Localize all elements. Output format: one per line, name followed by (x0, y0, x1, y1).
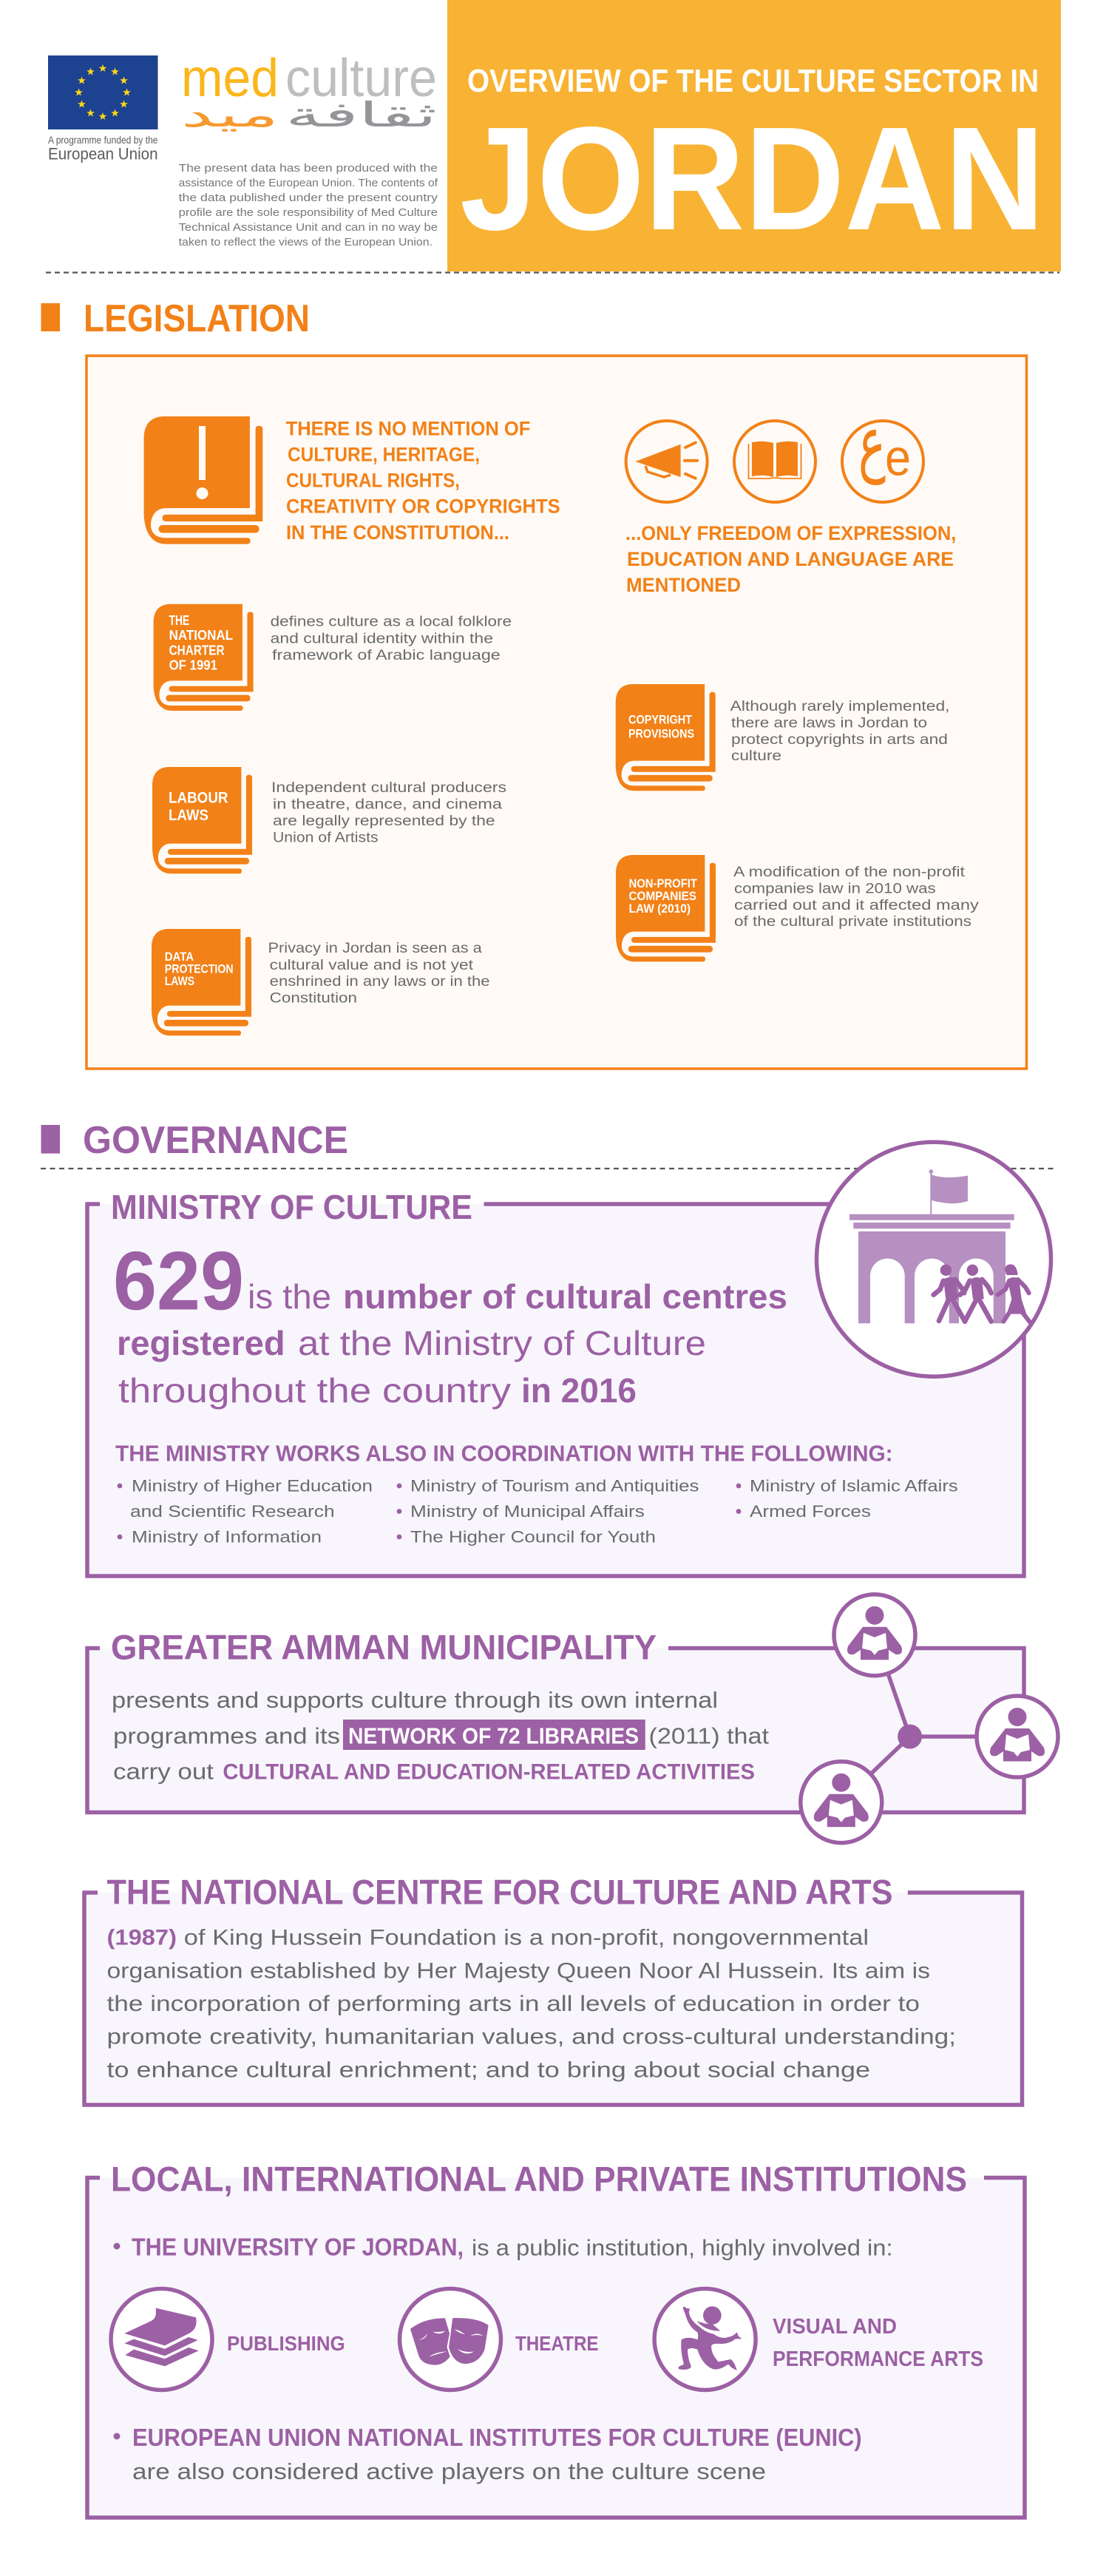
icon: library network (801, 1595, 1058, 1843)
list: partner ministries: The Higher Council for Youth (410, 1528, 656, 1546)
item: data protection laws: DATA (165, 950, 194, 964)
text: national centre description: to enhance cultural enrichment; and to bring about social change (106, 2058, 870, 2083)
heading: governance: GOVERNANCE (83, 1118, 348, 1161)
label: theatre: THEATRE (515, 2332, 599, 2355)
text: EUNIC (114, 2424, 862, 2484)
item: data protection laws: LAWS (165, 975, 194, 988)
panel: greater amman municipality (87, 1595, 1058, 1843)
heading: only freedom of expression (625, 522, 956, 596)
item: national charter: defines culture as a local folklore (271, 615, 512, 630)
icon: cultural centre with visitors (816, 1142, 1051, 1376)
item: national charter: CHARTER (169, 643, 225, 657)
text: national centre description: of King Hussein Foundation is a non-profit, nongovernmental (184, 1926, 869, 1950)
stat: 629 cultural centres: at the Ministry of Culture (298, 1324, 706, 1362)
item: national charter: framework of Arabic language (272, 648, 501, 663)
item: copyright provisions: there are laws in Jordan to (731, 715, 927, 731)
logo: Med Culture: ميد (181, 95, 279, 135)
text: university of jordan: THE UNIVERSITY OF JORDAN, (132, 2234, 464, 2261)
list: partner ministries: Ministry of Islamic Affairs (750, 1477, 958, 1495)
label: visual and performance arts: PERFORMANCE ARTS (773, 2347, 983, 2371)
icon: book with exclamation mark (144, 416, 262, 544)
text: amman description: carry out (113, 1759, 214, 1784)
list: partner ministries: and Scientific Research (130, 1502, 335, 1521)
icon: Arabic and Latin letters: e (885, 429, 911, 487)
stat: 629 cultural centres: number of cultural centres (343, 1277, 787, 1316)
panel: ministry of culture (87, 1142, 1051, 1576)
heading: no mention in constitution: THERE IS NO MENTION OF (286, 417, 530, 439)
heading: institutions: LOCAL, INTERNATIONAL AND PRIVATE INSTITUTIONS (111, 2160, 967, 2199)
disclaimer text: assistance of the European Union. The contents of (179, 177, 438, 189)
label: publishing: PUBLISHING (227, 2332, 345, 2355)
list: partner ministries: Ministry of Tourism and Antiquities (410, 1477, 699, 1495)
funding note: European Union (48, 145, 158, 163)
list: partner ministries (118, 1477, 958, 1546)
text: national centre description (106, 1926, 956, 2083)
item: non-profit companies law: of the cultural private institutions (734, 914, 971, 930)
panel: local, international and private institutions (87, 2160, 1025, 2518)
icon: publishing (111, 2288, 212, 2390)
heading: no mention in constitution: IN THE CONSTITUTION... (286, 521, 509, 544)
heading: no mention in constitution: CULTURAL RIGHTS, (286, 470, 460, 492)
item: data protection laws: PROTECTION (165, 963, 234, 976)
stat: 629 cultural centres: in 2016 (521, 1371, 637, 1410)
item: national charter: OF 1991 (169, 658, 217, 673)
title banner: JORDAN (460, 97, 1045, 261)
list: partner ministries: Ministry of Higher Education (132, 1477, 373, 1495)
disclaimer text: the data published under the present country (179, 192, 438, 204)
list: partner ministries: Ministry of Municipal Affairs (410, 1502, 645, 1521)
item: labour laws: are legally represented by the (273, 814, 495, 829)
disclaimer text: Technical Assistance Unit and can in no way be (179, 221, 438, 234)
icon: theatre masks (399, 2288, 501, 2390)
item: copyright provisions: Although rarely implemented, (730, 699, 949, 714)
text: amman description: presents and supports culture through its own internal (112, 1687, 718, 1713)
text: amman description: programmes and its (113, 1723, 340, 1749)
item: non-profit companies law: A modification of the non-profit (733, 865, 966, 880)
item: labour laws: LAWS (169, 807, 208, 824)
panel: legislation (87, 356, 1026, 1069)
logo: Med Culture (181, 49, 437, 135)
funding note (48, 134, 158, 163)
disclaimer text: taken to reflect the views of the European Union. (179, 236, 433, 249)
item: data protection laws: Constitution (270, 991, 357, 1007)
text: amman description: NETWORK OF 72 LIBRARIES (348, 1724, 639, 1749)
item: labour laws: Independent cultural producers (271, 780, 506, 796)
text: EUNIC: are also considered active players on the culture scene (132, 2458, 766, 2484)
heading: no mention in constitution: CULTURE, HERITAGE, (288, 443, 480, 465)
disclaimer text: The present data has been produced with the (179, 162, 438, 175)
item: labour laws: LABOUR (169, 790, 228, 807)
list: partner ministries: Armed Forces (750, 1502, 871, 1521)
stat: 629 cultural centres: throughout the country (118, 1371, 511, 1410)
text: university of jordan (114, 2234, 893, 2261)
heading: no mention in constitution (286, 417, 560, 544)
item: labour laws: Union of Artists (273, 831, 379, 846)
item: copyright provisions (616, 684, 949, 791)
heading: only freedom of expression: MENTIONED (626, 574, 741, 596)
item: national charter: NATIONAL (169, 628, 233, 643)
item: non-profit companies law: COMPANIES (628, 890, 696, 903)
logo: Med Culture: culture (285, 49, 437, 108)
item: non-profit companies law: NON-PROFIT (628, 877, 697, 890)
text: amman description: CULTURAL AND EDUCATION-RELATED ACTIVITIES (223, 1760, 755, 1784)
heading: legislation: LEGISLATION (84, 297, 310, 339)
label: visual and performance arts (773, 2315, 983, 2371)
icon: EU flag (48, 55, 158, 129)
title banner: OVERVIEW OF THE CULTURE SECTOR IN (467, 63, 1039, 99)
item: labour laws: in theatre, dance, and cinema (273, 797, 503, 813)
text: EUNIC: EUROPEAN UNION NATIONAL INSTITUTES FOR CULTURE (EUNIC) (132, 2424, 862, 2452)
icon: visual and performance arts (654, 2288, 756, 2390)
text: national centre description: the incorporation of performing arts in all levels of education in order to (106, 1992, 920, 2016)
stat: 629 cultural centres (113, 1235, 787, 1410)
item: non-profit companies law: companies law in 2010 was (734, 882, 936, 897)
title banner (447, 0, 1061, 271)
logo: Med Culture: ثقافة (285, 95, 437, 135)
label: visual and performance arts: VISUAL AND (773, 2315, 897, 2339)
disclaimer text: profile are the sole responsibility of Med Culture (179, 206, 438, 219)
text: amman description: (2011) that (649, 1723, 769, 1749)
text: university of jordan: is a public institution, highly involved in: (472, 2234, 893, 2260)
icon: megaphone (626, 421, 708, 502)
logo: Med Culture: med (181, 49, 279, 108)
item: national charter (154, 604, 512, 711)
item: national charter: THE (169, 613, 189, 628)
heading: only freedom of expression: EDUCATION AND LANGUAGE ARE (627, 548, 954, 570)
heading: ministry of culture: MINISTRY OF CULTURE (111, 1188, 472, 1226)
item: non-profit companies law: carried out and it affected many (734, 898, 979, 913)
heading: no mention in constitution: CREATIVITY OR COPYRIGHTS (286, 496, 560, 518)
subheading: coordination: THE MINISTRY WORKS ALSO IN COORDINATION WITH THE FOLLOWING: (115, 1441, 893, 1466)
heading: national centre: THE NATIONAL CENTRE FOR CULTURE AND ARTS (106, 1872, 893, 1911)
stat: 629 cultural centres: is the (248, 1277, 331, 1316)
item: copyright provisions: PROVISIONS (628, 727, 694, 740)
item: data protection laws: Privacy in Jordan is seen as a (268, 941, 482, 956)
funding note: A programme funded by the (48, 134, 158, 146)
disclaimer text (179, 162, 438, 249)
text: national centre description: organisation established by Her Majesty Queen Noor Al Hussein. Its aim is (106, 1958, 930, 1984)
heading: only freedom of expression: ...ONLY FREEDOM OF EXPRESSION, (625, 522, 956, 544)
panel: national centre for culture and arts (84, 1872, 1022, 2105)
item: national charter: and cultural identity within the (271, 631, 493, 646)
heading: greater amman: GREATER AMMAN MUNICIPALITY (111, 1627, 657, 1666)
icon: Arabic and Latin letters: ع (858, 401, 886, 485)
text: national centre description: (1987) (106, 1926, 177, 1950)
item: labour laws (152, 767, 506, 873)
item: non-profit companies law: LAW (2010) (628, 902, 691, 916)
icon: Arabic and Latin letters (842, 401, 923, 502)
item: data protection laws: enshrined in any laws or in the (270, 974, 489, 990)
icon: open book (734, 421, 815, 502)
item: data protection laws: cultural value and is not yet (270, 958, 474, 973)
text: amman description (112, 1687, 769, 1784)
item: copyright provisions: culture (731, 748, 781, 764)
stat: 629 cultural centres: 629 (113, 1235, 244, 1328)
item: non-profit companies law (616, 855, 979, 961)
text: national centre description: promote creativity, humanitarian values, and cross-cultural understanding; (106, 2025, 956, 2049)
item: data protection laws (152, 929, 489, 1035)
header: EU flag and funding note (48, 55, 158, 163)
item: copyright provisions: protect copyrights in arts and (731, 732, 948, 748)
stat: 629 cultural centres: registered (117, 1324, 285, 1362)
list: partner ministries: Ministry of Information (132, 1528, 322, 1546)
item: copyright provisions: COPYRIGHT (628, 714, 692, 727)
